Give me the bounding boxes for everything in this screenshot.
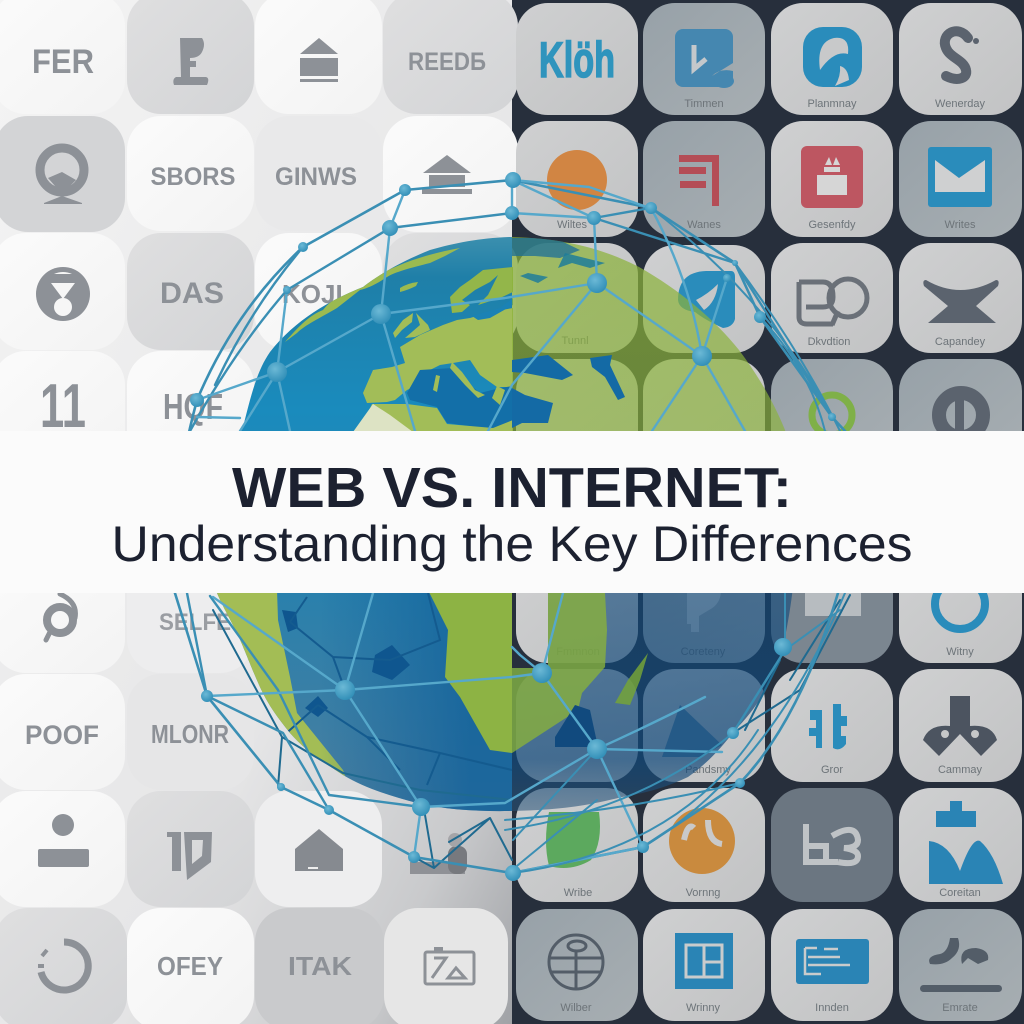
panel: internet side background bbox=[512, 0, 1024, 1024]
tile: Coreitan: Coreitan bbox=[939, 887, 981, 899]
tile: GINWS bbox=[255, 116, 382, 231]
tile: REEDB: REEDБ bbox=[408, 48, 486, 76]
tile: green glyph: Wribe bbox=[564, 887, 592, 899]
tile: Gror: Gror bbox=[821, 764, 843, 776]
tile: mail icon bbox=[899, 121, 1022, 237]
tile: window icon bbox=[643, 909, 765, 1021]
tile: SBORS bbox=[127, 116, 254, 231]
tile: Klöh logo: Klöh bbox=[539, 32, 615, 88]
tile: globe icon: Wilber bbox=[560, 1002, 592, 1014]
tile: leaf icon bbox=[643, 245, 765, 353]
tile: dark glyph bbox=[899, 359, 1022, 469]
tile: Emrate: Emrate bbox=[942, 1002, 978, 1014]
tile: eo logo bbox=[771, 243, 893, 353]
network nodes bbox=[190, 172, 836, 881]
land: pale highlight bbox=[353, 404, 413, 432]
tile: DAS: DAS bbox=[160, 277, 224, 310]
tile: Capandey: Capandey bbox=[935, 336, 986, 348]
tile: red glyph: Wanes bbox=[687, 219, 721, 231]
icon grid: web side bbox=[0, 0, 518, 1024]
tile: window icon: Wrinny bbox=[686, 1002, 721, 1014]
land: Sardinia bbox=[433, 375, 440, 392]
tile: orange circle bbox=[643, 788, 765, 902]
tile: person icon bbox=[0, 791, 125, 907]
tile: mail icon: Writes bbox=[945, 219, 976, 231]
land: lower right of web half bbox=[428, 590, 512, 753]
tile: REEDB bbox=[383, 0, 518, 114]
tile: Gror bbox=[771, 669, 893, 782]
ocean: lower right translucent bbox=[512, 593, 810, 815]
land: upper right translucent bbox=[512, 237, 786, 431]
tile: OFEY: OFEY bbox=[157, 951, 223, 981]
title banner bbox=[0, 431, 1024, 593]
tile: picture icon bbox=[384, 908, 508, 1024]
sea: Black Sea bbox=[512, 355, 573, 380]
land: Scandinavia bbox=[450, 267, 513, 313]
tile: white box bbox=[771, 547, 893, 663]
tile: hook icon bbox=[0, 558, 125, 673]
land: northern band bbox=[285, 248, 460, 342]
tile: Gesenfdy bbox=[771, 121, 893, 237]
globe: web half bbox=[200, 230, 513, 820]
tile: grey behind globe bbox=[383, 233, 518, 350]
tile: Wenerday: Wenerday bbox=[935, 98, 985, 110]
tile: Cammay: Cammay bbox=[938, 764, 982, 776]
globe: internet half bbox=[512, 230, 812, 815]
land: Africa east bbox=[512, 593, 607, 753]
tile: hS glyph bbox=[771, 788, 893, 902]
title: WEB VS. INTERNET: bbox=[232, 456, 792, 520]
tile: 11 icon: 11 bbox=[40, 372, 86, 441]
tile: Klöh logo bbox=[516, 3, 638, 115]
tile: 1D icon bbox=[127, 791, 254, 907]
icon grid: internet side bbox=[516, 3, 1022, 1021]
tile: Emrate bbox=[899, 909, 1022, 1021]
icon: partly hidden grey figure bbox=[410, 833, 467, 874]
tile: Gesenfdy: Gesenfdy bbox=[808, 219, 856, 231]
land: Madagascar bbox=[615, 653, 648, 705]
tile: Coreteny bbox=[643, 547, 765, 663]
land: Africa bbox=[370, 404, 513, 431]
tile: partly hidden label: KOJI bbox=[282, 279, 343, 309]
tile: orange circle: Vornng bbox=[686, 887, 720, 899]
land: small island bbox=[400, 282, 418, 292]
tile: POOF bbox=[0, 674, 125, 790]
dark back wire lines bbox=[213, 595, 850, 868]
subtitle: Understanding the Key Differences bbox=[112, 516, 912, 572]
tile: Wenerday bbox=[899, 3, 1022, 115]
tile: green ring bbox=[771, 359, 893, 469]
right side dense strands bbox=[505, 208, 845, 873]
tile: Timmen bbox=[643, 3, 765, 115]
tile: globe icon bbox=[516, 909, 638, 1021]
tile: list icon: Innden bbox=[815, 1002, 849, 1014]
tile: HQF bbox=[127, 351, 254, 471]
tile: eo logo: Dkvdtion bbox=[808, 336, 850, 348]
tile: Fmmnon bbox=[516, 547, 638, 663]
tile: Wiltes bbox=[516, 121, 638, 237]
tile: Tunnl bbox=[516, 243, 638, 353]
tile: Fmmnon: Fmmnon bbox=[556, 646, 600, 658]
tile: green glyph bbox=[516, 788, 638, 902]
tile: partly hidden label bbox=[255, 233, 382, 350]
tile: Wiltes: Wiltes bbox=[557, 219, 587, 231]
tile: Planmnay bbox=[771, 3, 893, 115]
land: Italy bbox=[450, 362, 485, 398]
land: Greece bbox=[492, 386, 505, 405]
tile: OFEY bbox=[127, 908, 254, 1024]
ocean: top rim bbox=[512, 238, 580, 258]
sea: Caspian bbox=[590, 355, 625, 400]
tile: Witny bbox=[899, 547, 1022, 663]
tile: loading ring bbox=[0, 908, 127, 1024]
outer wire ring bbox=[173, 180, 845, 873]
sea: Baltic bbox=[472, 298, 513, 320]
tile: MLONR: MLONR bbox=[151, 719, 229, 749]
tile: Cammay bbox=[899, 669, 1022, 782]
ocean: back wires bbox=[282, 593, 512, 785]
tile: ITAK: ITAK bbox=[288, 951, 352, 981]
tile: red glyph bbox=[643, 121, 765, 237]
land: lower left bbox=[217, 593, 346, 776]
tile: radiation icon bbox=[0, 233, 125, 350]
tile: ring icon bbox=[0, 116, 125, 232]
tile: home icon bbox=[255, 791, 382, 907]
tile: GINWS: GINWS bbox=[275, 163, 357, 191]
tile: DAS bbox=[127, 233, 254, 350]
tile: stand icon bbox=[127, 0, 254, 114]
tile: ITAK bbox=[255, 908, 384, 1024]
tile: Timmen: Timmen bbox=[684, 98, 724, 110]
tile: Coreitan bbox=[899, 788, 1022, 902]
sea: eastern Mediterranean bbox=[512, 388, 553, 428]
tile: Pandsmy: Pandsmy bbox=[685, 764, 731, 776]
tile: row 4 left bbox=[516, 359, 638, 469]
sea: northern inlets bbox=[520, 253, 605, 283]
tile: POOF: POOF bbox=[25, 720, 99, 750]
sea: dark inlet bbox=[555, 705, 598, 747]
tile: row 6 left bbox=[516, 669, 638, 782]
globe ocean left bbox=[200, 230, 512, 820]
tile: Pandsmy bbox=[643, 669, 765, 782]
tile: Coreteny: Coreteny bbox=[681, 646, 726, 658]
tile: Tunnl: Tunnl bbox=[561, 335, 589, 347]
ocean: deep shade bbox=[331, 593, 512, 812]
tile: SELFE: SELFE bbox=[159, 609, 231, 636]
tile: Witny: Witny bbox=[946, 646, 974, 658]
sea: dark plates bbox=[282, 610, 410, 717]
tile: house icon bbox=[255, 0, 382, 114]
sea: Mediterranean bbox=[407, 368, 513, 432]
tile: list icon bbox=[771, 909, 893, 1021]
land: UK bbox=[393, 313, 430, 338]
tile: SBORS: SBORS bbox=[150, 163, 236, 191]
tile: FER: FER bbox=[32, 43, 94, 81]
second wire ring bbox=[187, 208, 832, 810]
panel: web side background bbox=[0, 0, 512, 1024]
tile: bank icon bbox=[383, 116, 518, 232]
tile: HQF: HQF bbox=[163, 386, 223, 427]
sea: dark inlet east bbox=[662, 705, 722, 757]
front wire lines bbox=[197, 180, 745, 873]
tile: row 4 second bbox=[643, 359, 765, 469]
tile: FER bbox=[0, 0, 125, 114]
wireframe network around the globe bbox=[173, 172, 850, 881]
tile: MLONR bbox=[127, 674, 254, 790]
tile: SELFE bbox=[127, 558, 254, 673]
land: Europe bbox=[363, 308, 513, 403]
tile: Planmnay: Planmnay bbox=[808, 98, 857, 110]
tile: Capandey bbox=[899, 243, 1022, 353]
tile: 11 icon bbox=[0, 351, 125, 471]
